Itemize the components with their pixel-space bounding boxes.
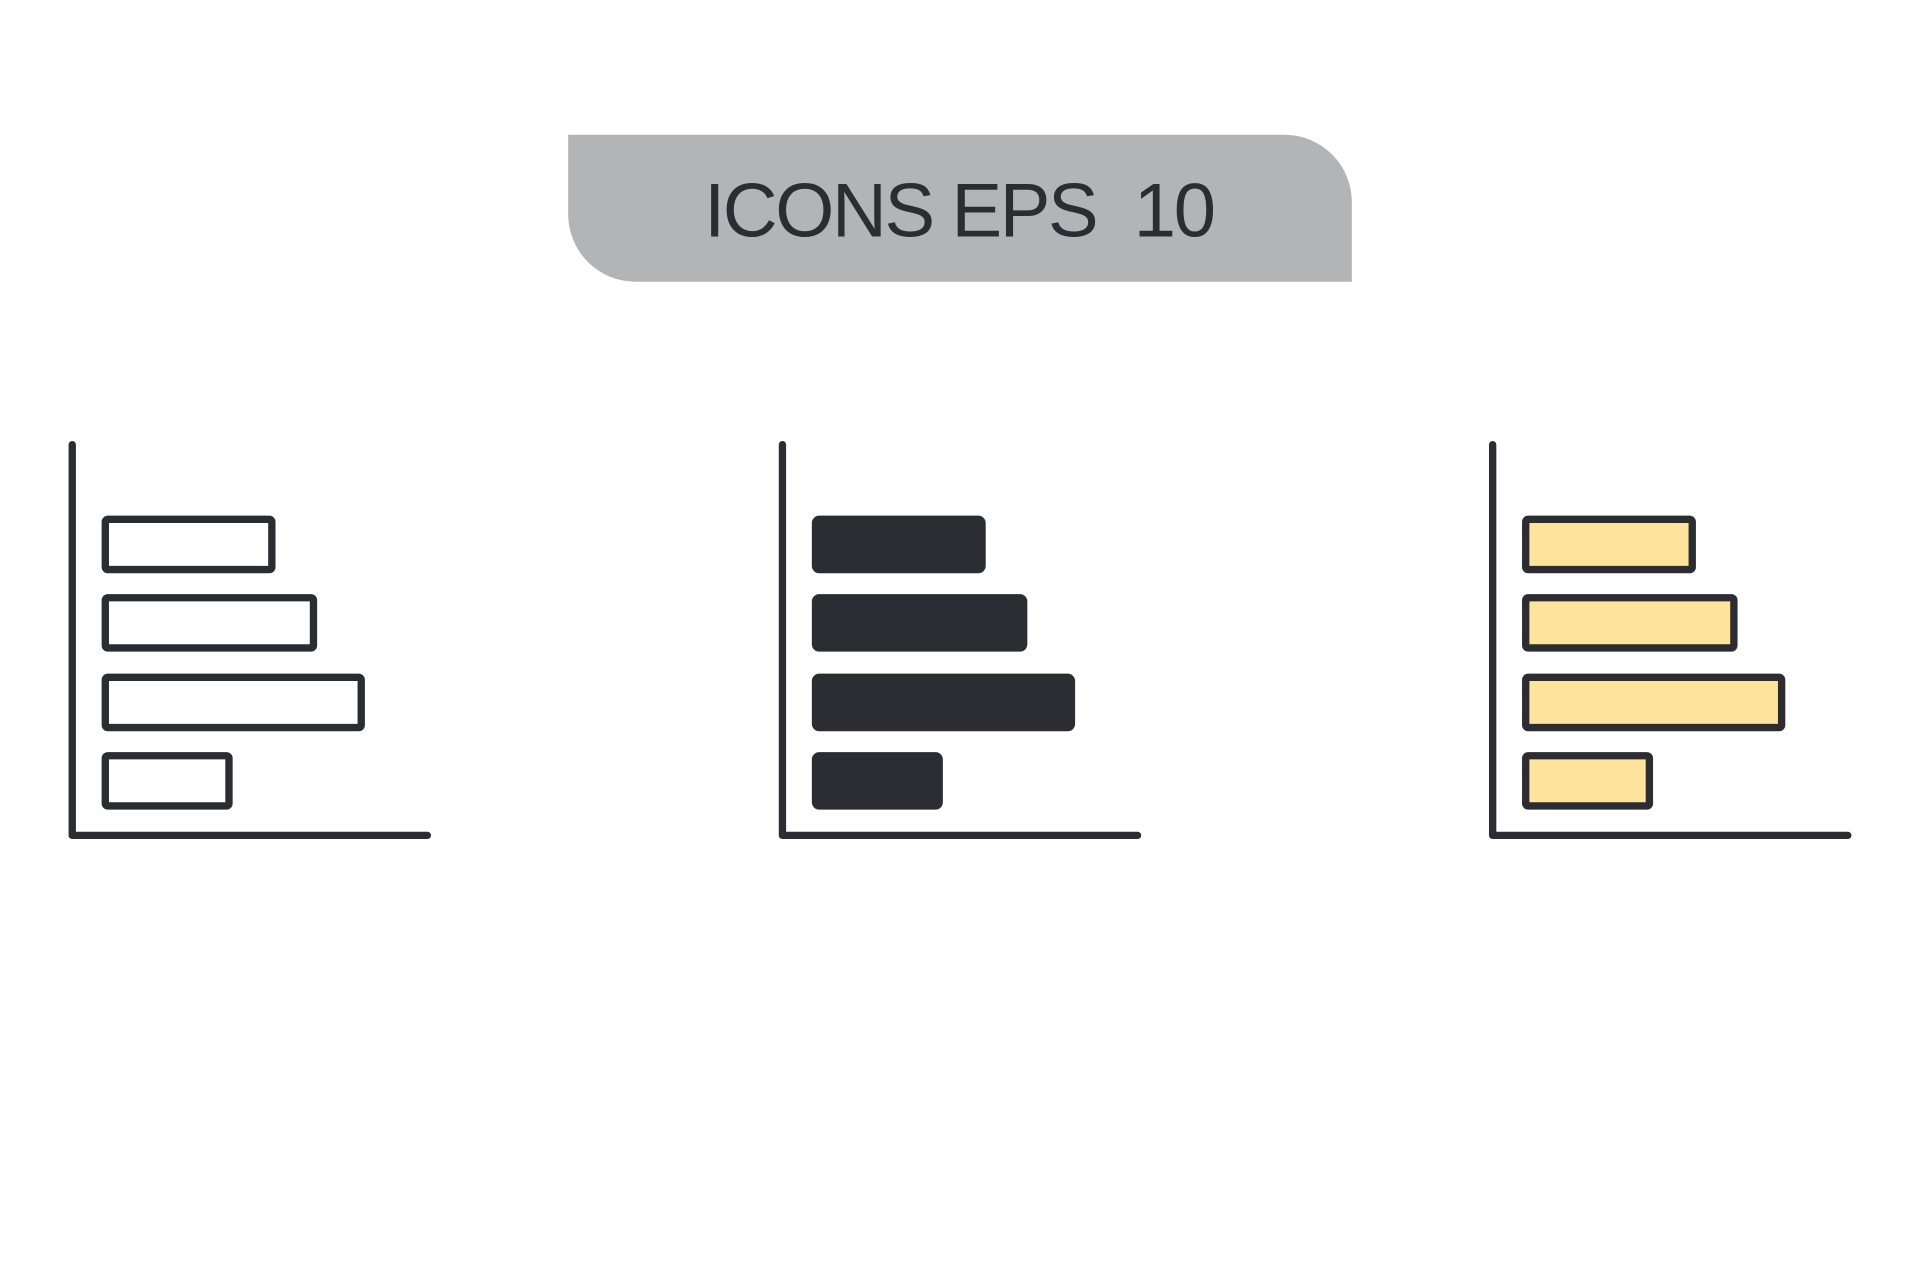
- icon: colored bar chart: [1493, 445, 1848, 835]
- icon: outline bar chart: [72, 445, 427, 835]
- banner: title: [568, 135, 1352, 282]
- title text: ICONS EPS 10: [704, 168, 1216, 253]
- icon: solid bar chart: [782, 445, 1138, 835]
